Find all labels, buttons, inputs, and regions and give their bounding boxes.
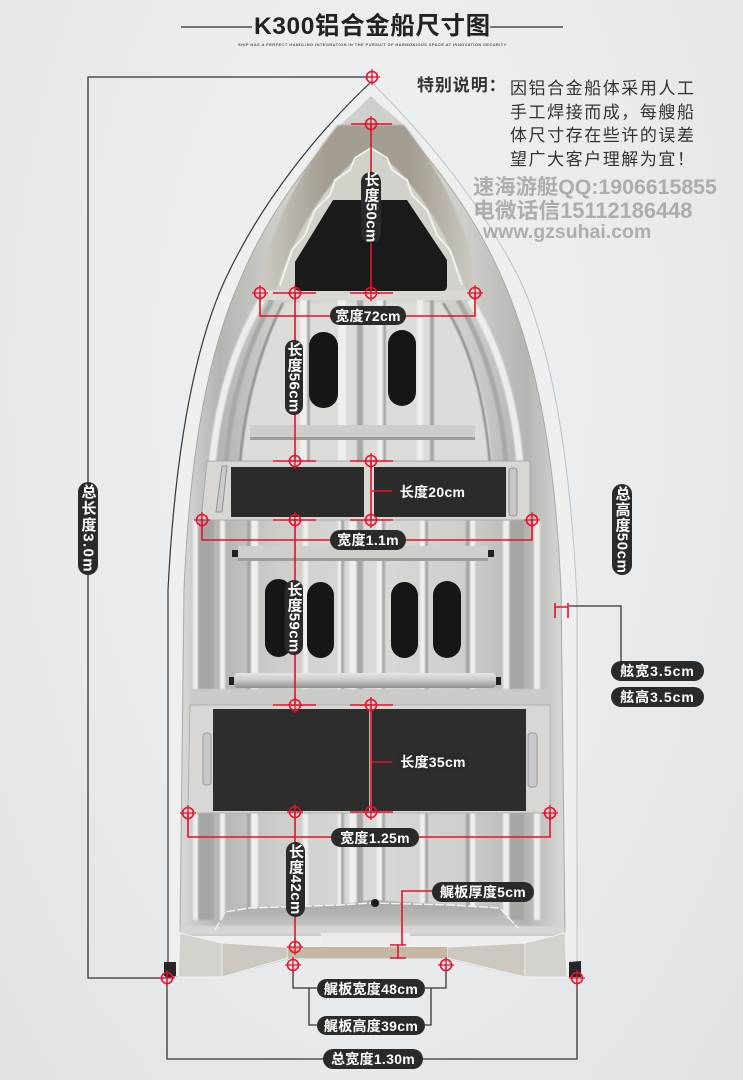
bow black pad	[295, 200, 447, 291]
label: width 1.1	[330, 530, 406, 550]
middle seat	[201, 461, 530, 520]
label: length 20: 长度20cm	[400, 484, 465, 500]
special note text: 手工焊接而成，每艘船	[510, 102, 696, 122]
target markers	[159, 69, 585, 986]
oval foot pads	[265, 330, 461, 658]
floor ribs	[180, 300, 565, 935]
label: transom thickness: 艉板厚度5cm	[440, 884, 526, 900]
label: transom width: 艉板宽度48cm	[324, 980, 418, 996]
special note text: 望广大客户理解为宜！	[510, 150, 696, 168]
special note text: 因铝合金船体采用人工	[510, 79, 696, 98]
label: transom thickness	[432, 882, 534, 902]
label: total length: 总长度3.0m	[80, 484, 96, 573]
special note text	[510, 79, 696, 168]
label: width 1.1: 宽度1.1m	[337, 532, 399, 548]
label: side height: 舷高3.5cm	[620, 689, 695, 705]
red dimension lines	[188, 124, 568, 958]
dark dimension lines	[88, 77, 621, 1059]
watermark	[473, 175, 717, 243]
crossbars	[190, 425, 550, 705]
watermark: www.gzsuhai.com	[483, 221, 651, 243]
label: side width: 舷宽3.5cm	[620, 663, 695, 679]
label: side width	[611, 661, 704, 681]
title rules	[181, 26, 563, 28]
label: width 1.25	[331, 828, 419, 847]
stern transom	[164, 899, 581, 978]
watermark: 速海游艇QQ:1906615855	[473, 175, 717, 199]
label: length 59: 长度59cm	[286, 582, 302, 653]
deck lip	[254, 290, 480, 300]
label: total width: 总宽度1.30m	[331, 1051, 415, 1067]
label: length 56: 长度56cm	[286, 342, 302, 413]
bow deck	[254, 97, 480, 300]
label: length 42: 长度42cm	[287, 844, 304, 915]
label: width 1.25: 宽度1.25m	[340, 830, 410, 846]
label: width 72: 宽度72cm	[335, 308, 401, 324]
boat diagram	[87, 26, 622, 1060]
hull	[168, 82, 577, 977]
label: bow length: 长度50cm	[362, 172, 380, 243]
label: transom height: 艉板高度39cm	[324, 1018, 418, 1034]
special note label: 特别说明：	[417, 76, 506, 95]
special note text: 体尺寸存在些许的误差	[510, 126, 696, 145]
label: length 35: 长度35cm	[400, 754, 466, 770]
rear seat	[188, 705, 550, 813]
watermark: 电微话信15112186448	[473, 198, 692, 223]
label: total width	[323, 1049, 423, 1069]
label: side height	[611, 687, 704, 707]
title: K300铝合金船尺寸图	[254, 13, 491, 40]
label: total height: 总高度50cm	[614, 486, 630, 573]
